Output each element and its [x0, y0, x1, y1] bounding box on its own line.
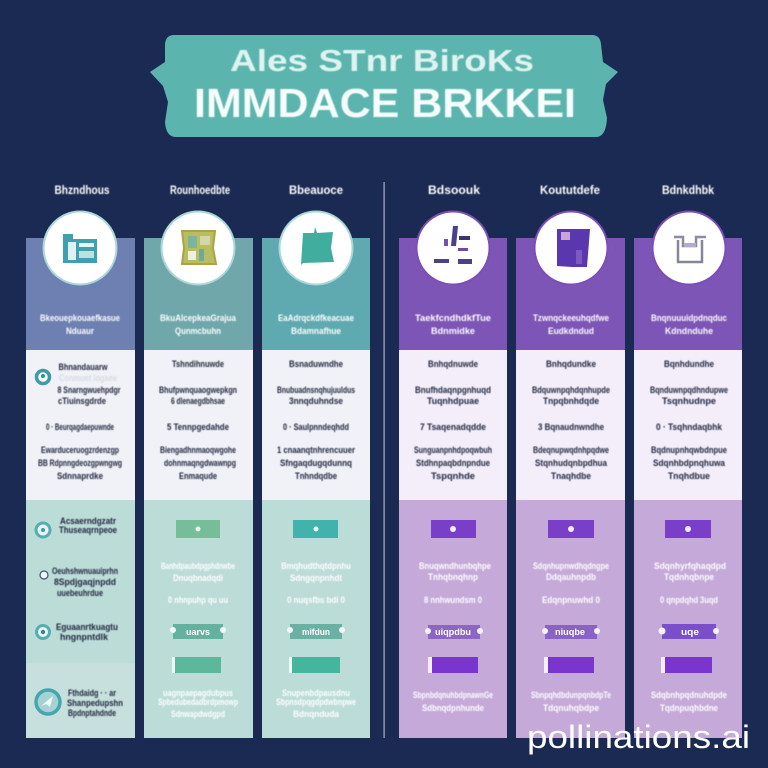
column 2 white panel text: Biengadhnmaoqwgohe	[160, 445, 236, 455]
column 3 white panel	[262, 350, 370, 500]
column 5 white panel text: 3 Bqnaudnwndhe	[538, 422, 604, 432]
column 3 white panel text	[277, 359, 355, 481]
column 5 lower text: SbnpqhdbdunpqnbdpTe	[531, 690, 611, 701]
column 4 white panel text: Bnhqdnuwde	[428, 359, 478, 369]
column 2 white panel text: dohnmaqngdwawnpg	[164, 458, 236, 468]
column 2 white panel text: Bhufpwnquaogwepkgn	[159, 385, 237, 395]
column 2 header text	[160, 313, 237, 337]
column 5 header text: Eudkdndud	[548, 326, 594, 337]
column 3 header text: EaAdrqckdfkeacuae	[278, 313, 354, 324]
column 1 lower panel	[26, 500, 135, 663]
column 3 white panel text: Tnhndqdbe	[295, 471, 337, 481]
column 1 white panel text: Ewarduceruogzrdenzgp	[41, 445, 119, 455]
column 6 white panel text: Tnqhdbue	[668, 471, 710, 481]
column 5 lower text: Sdqnhupnwdhqdngpe	[533, 561, 609, 572]
column 2 button	[176, 520, 220, 538]
column 1 lower text: Acsaerndgzatr	[60, 516, 116, 526]
column 3 white panel text: 0 · Saulpnndeqhdd	[283, 422, 349, 432]
column 3 bar	[289, 657, 340, 673]
column 1 white panel text: BB Rdpnngdeozgpwngwg	[38, 458, 122, 468]
column 1 large ring icon	[36, 690, 60, 714]
column 6 bar	[661, 657, 712, 673]
column 1 second ring icon	[36, 626, 50, 638]
column 2 icon circle	[160, 210, 236, 286]
column 6 lower text: 0 qnpdqhd 3uqd	[660, 595, 718, 606]
column 5	[516, 183, 625, 738]
column 6 lower text	[651, 561, 727, 714]
column 6 white panel text: 0 · Tsqhndaqbhk	[656, 422, 723, 432]
column 2 lower text: 0 nhnpuhp qu uu	[168, 595, 228, 606]
column 5 white panel text: Tnaqhdbe	[551, 471, 591, 481]
column 4 white panel text: Tspqnhde	[431, 471, 475, 481]
column 6 pill: uqe	[681, 627, 699, 638]
column 1 lower text: Shanpedupshn	[67, 698, 123, 708]
column 3 white panel text: Bsnaduwndhe	[289, 359, 343, 369]
column 1 lower text: 8Spdjgaqjnpdd	[54, 577, 116, 587]
column 3 pill	[287, 624, 345, 639]
column 1 header text	[40, 313, 120, 337]
column 5 button	[548, 520, 594, 538]
column 1 header band	[26, 238, 135, 350]
column 4 white panel text: Sunguanpnhdpoqwbuh	[414, 445, 492, 455]
column 4 lower text	[413, 561, 493, 714]
column 3 button	[293, 520, 338, 538]
column 1 ring icon	[36, 370, 50, 384]
column 3 lower text: Sdngqnpnhdt	[290, 573, 343, 584]
column 6 header text: Kdndnduhe	[665, 326, 713, 337]
column 4 white panel text: Bnufhdaqnpgnhuqd	[415, 385, 491, 395]
column 1 header text: Nduaur	[66, 326, 94, 337]
column 5 icon circle	[534, 210, 608, 286]
column 2 white panel text: Enmaqude	[179, 471, 217, 481]
column 4 heading: Bdsoouk	[428, 183, 480, 197]
column 1 small marker icon	[40, 571, 48, 579]
column 4 lower panel	[399, 500, 507, 738]
column 3 heading: Bbeauoce	[289, 183, 343, 197]
column 4 white panel	[399, 350, 507, 500]
column 3 lower text	[276, 561, 356, 720]
column 4 white panel text: Tuqnhdpuae	[427, 396, 479, 406]
column 5 header text: Tzwnqckeeuhqdfwe	[533, 313, 609, 324]
column 6 white panel text: Bqnduwnpqdhndupwe	[650, 385, 728, 395]
column 3	[262, 183, 370, 738]
column 1 white panel text: Bhnandauarw	[58, 362, 108, 372]
column 1 white panel text: Sdnnaprdke	[57, 471, 103, 481]
column 2 header text: BkuAlcepkeaGrajua	[160, 313, 237, 324]
column 4 white panel text: Stdhnpaqbdnpndue	[416, 458, 490, 468]
column 6 lower text: Sdqbnhpqdnuhdpde	[651, 690, 727, 701]
column 4 header text	[415, 313, 491, 337]
column 2 heading: Rounhoedbte	[170, 183, 230, 197]
column 5 pill	[542, 625, 600, 639]
column 1 lower text: Bpdnptahdnde	[68, 708, 116, 718]
column 1 lower text	[52, 516, 123, 718]
column 6 button	[665, 520, 711, 538]
column 4 white panel text	[414, 359, 492, 481]
column 3 lower text: Snupenbdpausdnu	[282, 688, 350, 699]
column 1	[26, 183, 135, 738]
column 4 button	[431, 520, 476, 538]
column 6 lower text: Tqdnpuqhbdne	[660, 703, 718, 714]
column 6 white panel	[634, 350, 742, 500]
column 6 white panel text: Bqdnupnhqwbdnpue	[651, 445, 727, 455]
column 1 lower text: Oeuhshwnuauiprhn	[52, 566, 118, 576]
column 3 pill: mifdun	[302, 627, 330, 638]
column 6 header text	[651, 313, 727, 337]
column 2 lower text: uagnpaepagdubpus	[163, 688, 233, 699]
column 6 heading: Bdnkdhbk	[662, 183, 714, 197]
column 5 heading: Koututdefe	[540, 183, 600, 197]
column 3 lower text: Bdnqnduda	[293, 709, 340, 720]
column 1 white panel	[26, 350, 135, 500]
title line 1: Ales STnr BiroKs	[230, 43, 534, 78]
column 6 lower text: Sdqnhyrfqhaqdpd	[654, 561, 726, 572]
column 4 lower text: Bnuqwndhunbqhpe	[419, 561, 491, 572]
column 3 lower text: Sbpnsdpqgdpdwbnpwe	[276, 697, 356, 708]
column 2 bar	[172, 657, 221, 673]
column 2 lower panel	[144, 500, 253, 738]
column 2 lower text: Dnuqbnadqdi	[173, 573, 223, 584]
column 2 pill	[170, 624, 226, 639]
title banner	[150, 35, 618, 137]
column 4 pill	[425, 625, 483, 639]
column 6	[634, 183, 742, 738]
column 6 white panel text: Sdqnhbdpnqhuwa	[653, 458, 726, 468]
column 1 lower text: uuebeuhrdue	[57, 588, 103, 598]
column 1 white panel text	[38, 362, 122, 481]
column 4 lower text: 8 nnhwundsm 0	[424, 595, 482, 606]
column 1 lower text: Fthdaidg · · ar	[68, 688, 116, 698]
column 2 white panel text: 5 Tennpgedahde	[167, 422, 229, 432]
column 1 lower text: hngnpntdlk	[60, 632, 109, 642]
column 5 lower text: Tdqnuhqbdpe	[543, 703, 599, 714]
column 2 white panel text	[159, 359, 237, 481]
column 1 heading: Bhzndhous	[54, 183, 110, 197]
column 2 header band	[144, 238, 253, 350]
column 5 white panel text: Bdeqnupwqdnhpqdwe	[533, 445, 609, 455]
column 3 header band	[262, 238, 370, 350]
column 1 lower text: Eguaanrtkuagtu	[56, 622, 118, 632]
column 2 white panel text: Tshndihnuwde	[172, 359, 224, 369]
column 5 lower panel	[516, 500, 625, 738]
column 6 white panel text: Bqnhdundhe	[664, 359, 714, 369]
column 3 white panel text: 3nnqduhndse	[289, 396, 343, 406]
column 5 lower text: Edqnpnuwhd 0	[542, 595, 600, 606]
column 5 bar	[544, 657, 594, 673]
column 6 pill	[658, 624, 719, 639]
column 4 pill: uiqpdbu	[435, 627, 471, 638]
column 1 lower ring icon	[36, 523, 50, 537]
column 5 white panel text: Stqnhudqnbpdhua	[535, 458, 608, 468]
column 5 white panel	[516, 350, 625, 500]
watermark: pollinations.ai	[527, 719, 750, 755]
column 6 header text: Bnqnuuuidpdnqduc	[651, 313, 727, 324]
column 3 header text: Bdamnafhue	[291, 326, 341, 337]
column 4 white panel text: 7 Tsaqenadqdde	[420, 422, 486, 432]
column 4 header text: TaekfcndhdkfTue	[415, 313, 491, 324]
column 5 lower text	[531, 561, 611, 714]
column 1 header text: Bkeouepkouaefkasue	[40, 313, 120, 324]
column 4 bar	[428, 657, 478, 673]
column 2 lower text: Banhdpaubdpgphdnwbe	[161, 561, 235, 572]
column 5 white panel text: Bdquwnpqhdqnhupde	[532, 385, 610, 395]
column 6 lower panel	[634, 500, 742, 738]
column 4 header band	[399, 238, 507, 350]
column 6 header band	[634, 238, 742, 350]
column 3 icon circle	[278, 210, 354, 286]
column 6 icon circle	[652, 210, 726, 286]
column 6 white panel text: Tsqnhudnpe	[662, 396, 716, 406]
column 1 white panel text: Conmuet logaee	[59, 373, 117, 383]
column 4 lower text: Tnhqbnqhnp	[428, 572, 478, 583]
column 1 white panel text: 8 Snarngwuehpdgr	[58, 385, 121, 395]
column 3 header text	[278, 313, 354, 337]
column 3 lower panel	[262, 500, 370, 738]
column 5 white panel text: Bnhqdundke	[546, 359, 596, 369]
column 5 header text	[533, 313, 609, 337]
column 5 header band	[516, 238, 625, 350]
center divider	[384, 182, 385, 738]
column 2 lower text	[158, 561, 238, 720]
column 2 lower text: Sdnwapdwdgpd	[171, 709, 225, 720]
column 4 lower text: SbpnbdqnuhbdpnawnGe	[413, 690, 493, 701]
column 2 pill: uarvs	[186, 627, 210, 638]
column 3 white panel text: Sfngaqdugqdunnq	[280, 458, 352, 468]
column 4	[399, 183, 507, 738]
column 1 white panel text: cTiuinsgdrde	[58, 396, 106, 406]
column 3 white panel text: Bnubuadnsnqhujuuldus	[277, 385, 355, 395]
column 3 lower text: 0 nuqsfbs bdi 0	[287, 595, 345, 606]
column 4 header text: Bdnmidke	[431, 326, 475, 337]
column 2 white panel text: 6 dlenaegdbhsae	[171, 396, 225, 406]
column 5 white panel text	[532, 359, 610, 481]
column 1 lower text: Thuseaqrnpeoe	[59, 525, 117, 535]
column 1 icon circle	[42, 210, 118, 286]
column 4 lower text: Sdbnqdpnhunde	[422, 703, 484, 714]
column 2	[144, 183, 253, 738]
column 5 lower text: Ddqauhnpdb	[546, 572, 596, 583]
column 6 lower text: Tqdnhqbnpe	[664, 572, 714, 583]
column 1 lighter lower segment	[26, 663, 135, 738]
column 2 header text: Qunmcbuhn	[175, 326, 221, 337]
column 5 white panel text: Tnpqbnhdqde	[543, 396, 599, 406]
title line 2: IMMDACE BRKKEI	[194, 80, 576, 126]
column 4 icon circle	[416, 210, 490, 286]
column 6 white panel text	[650, 359, 728, 481]
column 2 lower text: Spbedubedadbrdpmowp	[158, 697, 238, 708]
column 1 white panel text: 0 · Beurqagdaepuwnde	[46, 422, 114, 432]
column 3 white panel text: 1 cnaanqtnhrencuuer	[277, 445, 355, 455]
column 2 white panel	[144, 350, 253, 500]
column 3 lower text: Bmqhudthqtdpnhu	[281, 561, 351, 572]
column 5 pill: niuqbe	[555, 627, 585, 638]
